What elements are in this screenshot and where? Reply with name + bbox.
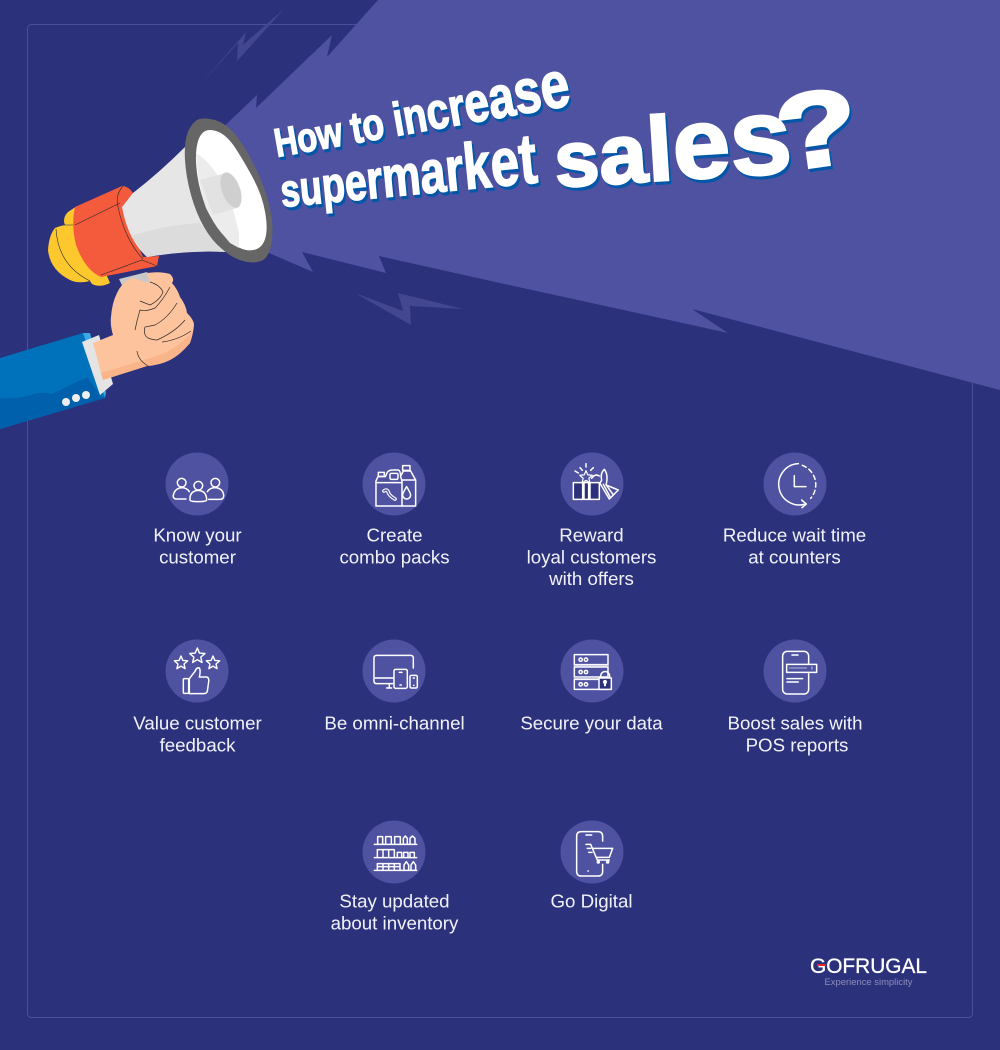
label: about inventory (331, 912, 459, 934)
red body (73, 186, 159, 277)
item: reduce wait time (723, 452, 866, 568)
handle (119, 272, 158, 298)
logo wordmark: GOFRUGAL (810, 955, 927, 978)
icon: packages (362, 452, 426, 516)
megaphone sound beam (215, 0, 1000, 390)
label: Know your (153, 524, 242, 546)
icon: devices (362, 640, 426, 702)
item: boost sales with POS reports (727, 640, 863, 756)
icon: gift (560, 452, 624, 516)
icon: shelves (362, 820, 426, 884)
top lightning bolt (199, 8, 285, 86)
label: Reward (559, 524, 624, 546)
label: POS reports (746, 734, 848, 756)
item: stay updated about inventory (331, 820, 459, 934)
megaphone and hand illustration (0, 118, 272, 429)
icon: server and lock (560, 640, 624, 702)
label: Value customer (133, 712, 262, 734)
icon: clock (764, 452, 826, 516)
item: value customer feedback (133, 640, 262, 756)
label: feedback (160, 734, 236, 756)
yellow rear cap (48, 206, 110, 286)
logo (810, 955, 927, 987)
label: Go Digital (550, 890, 633, 912)
item: go digital (550, 820, 633, 912)
speaker cap (216, 170, 246, 210)
sleeve (0, 333, 106, 429)
label: combo packs (339, 546, 450, 568)
label: Boost sales with (727, 712, 863, 734)
item: reward loyal customers (527, 452, 656, 589)
item: create combo packs (339, 452, 450, 568)
hand (93, 272, 194, 380)
logo tagline: Experience simplicity (824, 977, 913, 987)
icon: phone report (764, 640, 826, 702)
label: Stay updated (339, 890, 450, 912)
speaker throat (200, 174, 240, 215)
icon: stars and thumb (166, 640, 228, 702)
horn (122, 147, 227, 257)
bottom lightning bolt (355, 293, 463, 325)
cuff (82, 335, 113, 395)
label: at counters (748, 546, 841, 568)
item: know your customer (153, 452, 242, 568)
speaker ring (185, 118, 272, 262)
icon: phone and cart (560, 820, 624, 884)
title line: supermarket: supermarket (276, 120, 540, 223)
label: with offers (548, 568, 634, 589)
label: Reduce wait time (723, 524, 866, 546)
label: Create (366, 524, 423, 546)
title word: sales: sales (550, 74, 795, 210)
item: be omni-channel (324, 640, 465, 734)
speaker cone shading (196, 153, 239, 248)
icon: people (166, 452, 228, 516)
speaker inner (196, 130, 267, 250)
item: secure your data (520, 640, 663, 734)
label: loyal customers (527, 546, 656, 568)
title (267, 46, 865, 223)
label: customer (159, 546, 236, 568)
title question mark: ? (769, 65, 865, 194)
title line: How to increase: How to increase (267, 46, 575, 171)
label: Be omni-channel (324, 712, 465, 734)
logo red dash (817, 964, 826, 966)
label: Secure your data (520, 712, 663, 734)
